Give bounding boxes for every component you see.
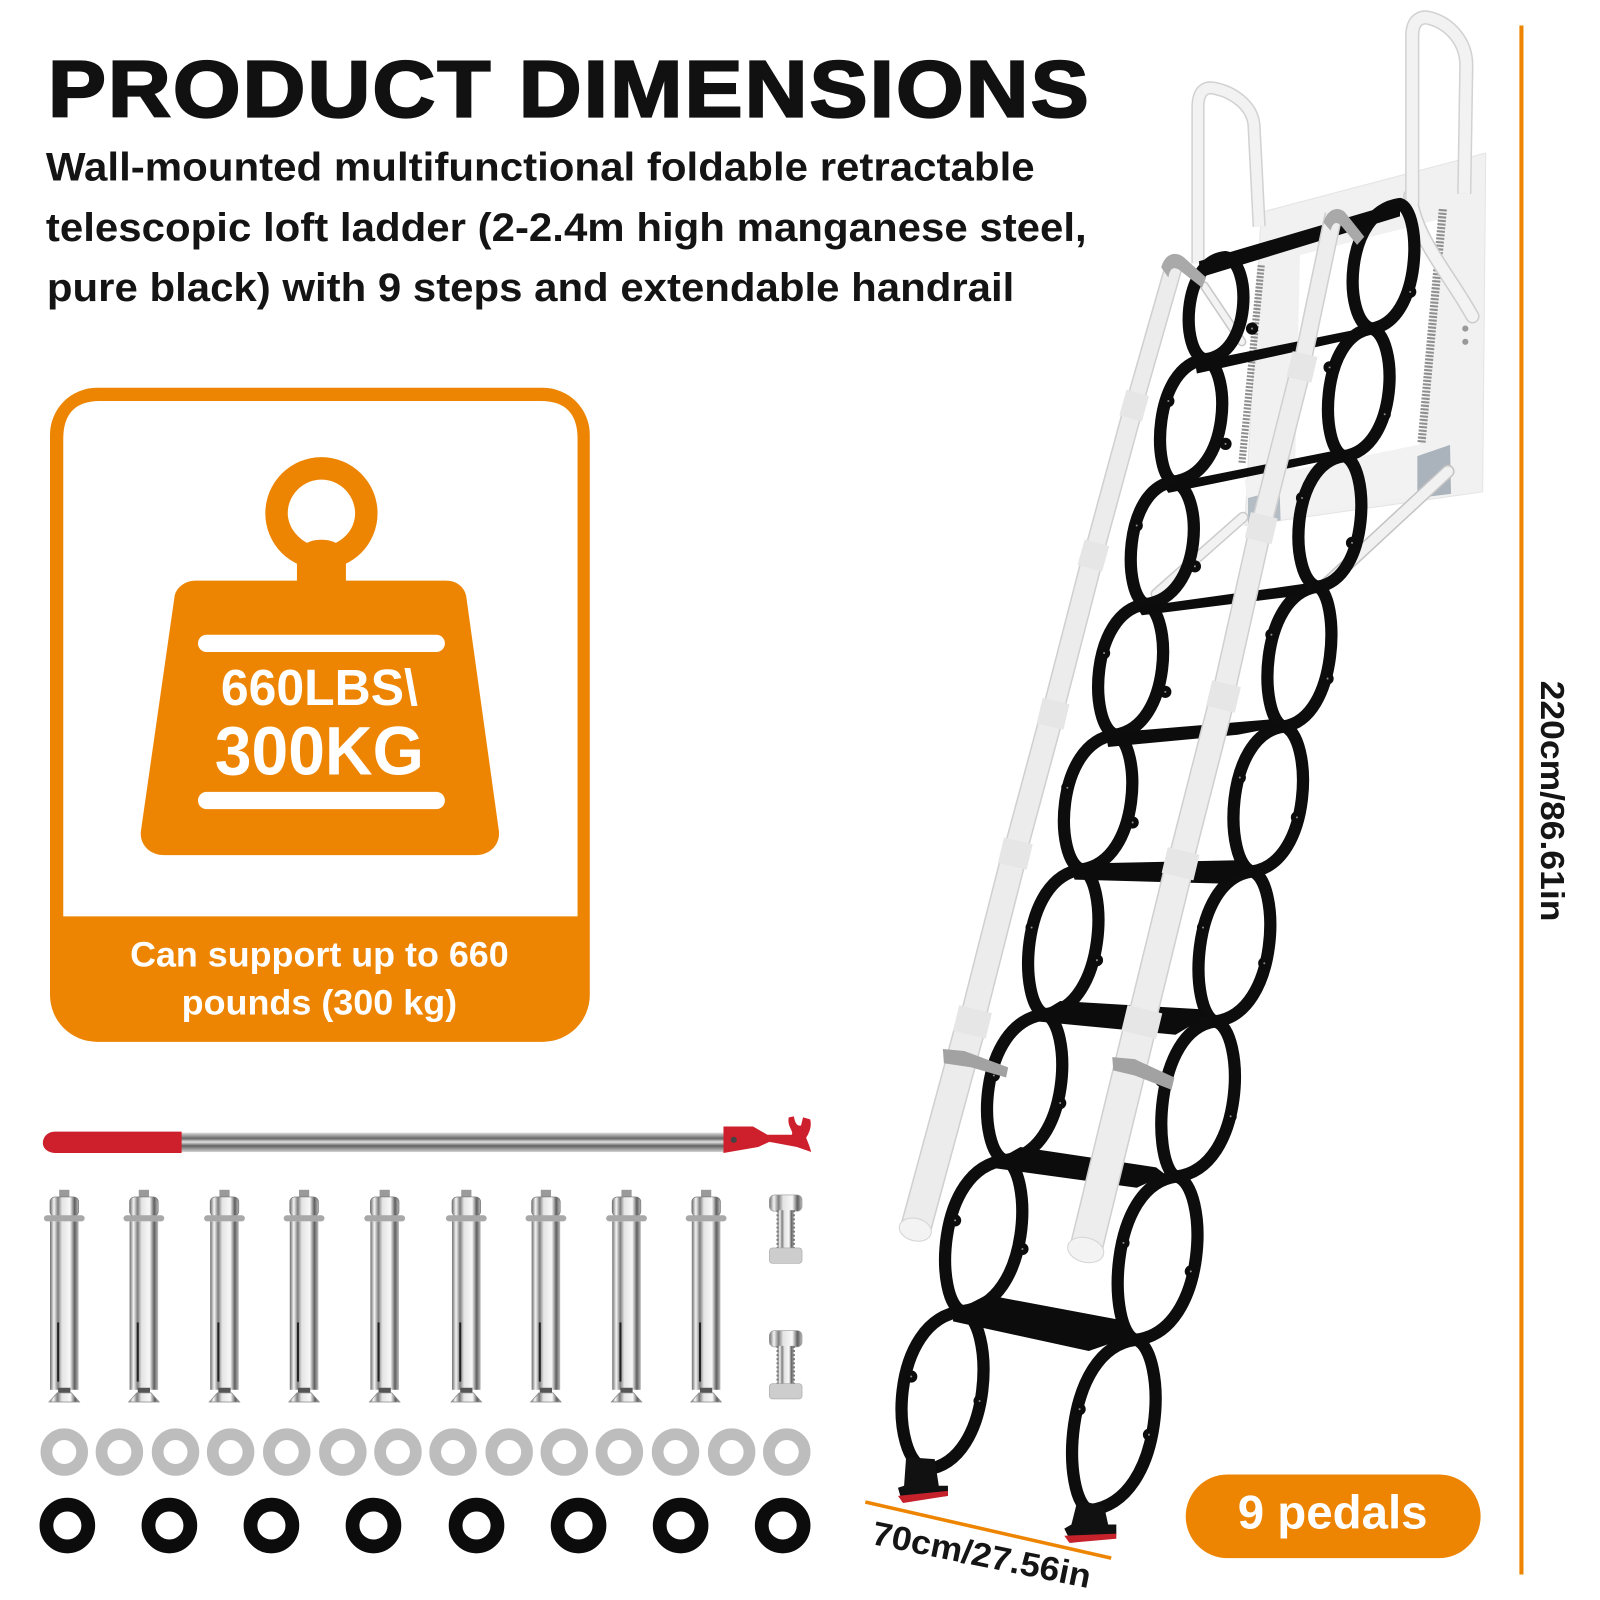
ladder feet xyxy=(898,1457,1116,1543)
panel caption: pounds (300 kg) xyxy=(182,983,457,1022)
small bolts xyxy=(769,1195,802,1399)
subtitle text block: Wall-mounted multifunctional foldable retractable xyxy=(46,145,1035,190)
right scissor chain xyxy=(1072,204,1414,1510)
height label: 220cm/86.61in xyxy=(1533,681,1570,921)
title: PRODUCT DIMENSIONS xyxy=(48,44,1091,133)
width dimension line xyxy=(865,1502,1111,1558)
wall mounting frame xyxy=(1242,153,1486,526)
pedal count badge: 9 pedals xyxy=(1238,1487,1428,1539)
ladder illustration xyxy=(897,18,1486,1543)
chain rivets xyxy=(908,288,1414,1438)
width label: 70cm/27.56in xyxy=(869,1515,1094,1596)
expansion anchor bolts xyxy=(44,1190,727,1402)
pedals xyxy=(953,202,1400,1351)
panel: load capacity xyxy=(50,388,590,1042)
rail hooks xyxy=(1161,209,1364,288)
panel caption xyxy=(130,935,509,1022)
rail clamps xyxy=(943,1049,1174,1090)
upper hand grips xyxy=(1198,18,1466,263)
pedal count badge xyxy=(1186,1474,1481,1558)
panel caption: Can support up to 660 xyxy=(130,935,509,974)
rail end caps xyxy=(897,1215,1106,1266)
icon: weight xyxy=(141,457,499,855)
height dimension line xyxy=(1519,26,1523,1574)
left scissor chain xyxy=(902,257,1243,1469)
left handrail xyxy=(914,267,1173,1234)
telescopic pole tool xyxy=(43,1116,811,1153)
weight label kilograms: 300KG xyxy=(215,713,424,789)
weight label pounds: 660LBS\ xyxy=(221,659,418,716)
flat washers xyxy=(46,1434,805,1470)
subtitle text block: telescopic loft ladder (2-2.4m high manganese steel, xyxy=(46,205,1087,250)
subtitle text block xyxy=(46,145,1087,310)
white support struts xyxy=(1156,196,1472,594)
black rubber rings xyxy=(46,1505,804,1546)
subtitle text block: pure black) with 9 steps and extendable handrail xyxy=(47,265,1014,310)
right handrail xyxy=(1085,214,1334,1254)
